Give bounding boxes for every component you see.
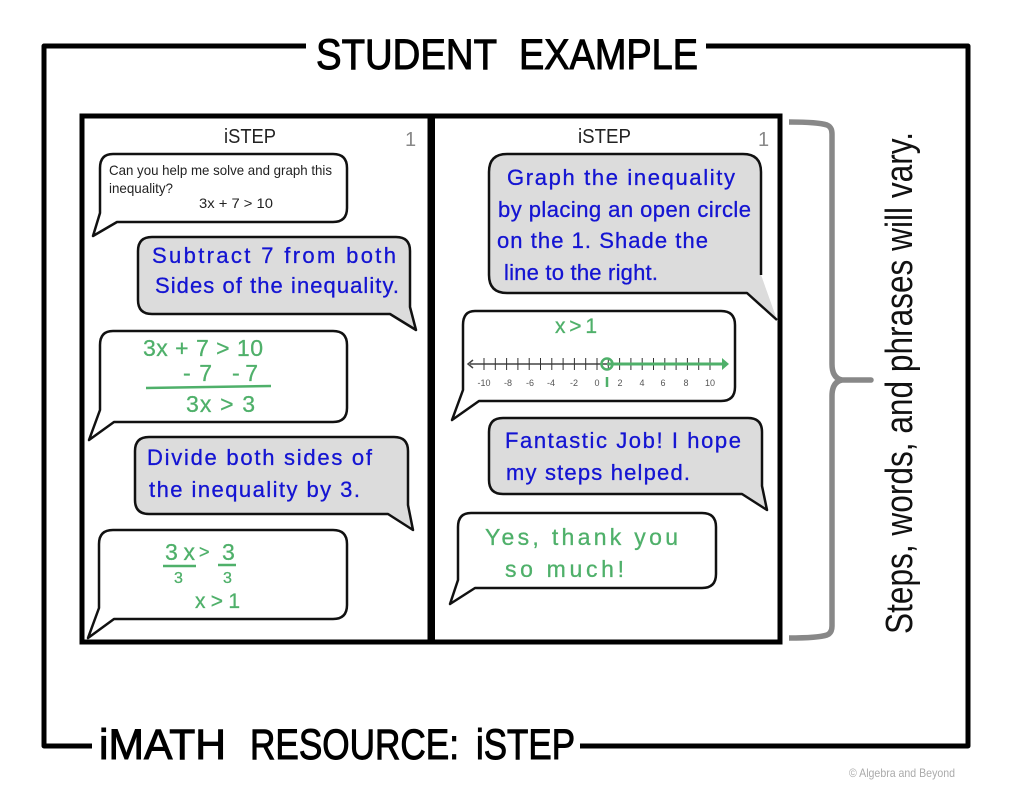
panel: right iSTEP	[428, 116, 780, 642]
bubble: subtraction work: -7	[232, 360, 258, 386]
number line graph: 4	[639, 378, 645, 388]
bubble: division work: 3	[174, 570, 183, 587]
bubble: question: 3x + 7 > 10	[199, 195, 273, 211]
bubble: subtraction work: 3x + 7 > 10	[143, 335, 263, 361]
bubble: encouragement	[489, 418, 767, 510]
panel divider	[428, 116, 435, 642]
bubble: division work: x > 1	[195, 590, 240, 613]
footer heading: RESOURCE:	[250, 721, 459, 769]
left heading: iSTEP	[224, 126, 276, 148]
right heading: iSTEP	[578, 126, 631, 148]
bubble: division work: 3x	[165, 539, 196, 565]
bubble: graph step: by placing an open circle	[498, 197, 751, 222]
bubble: question: Can you help me solve and graph this	[109, 162, 332, 178]
number line graph: -4	[547, 378, 555, 388]
number line graph: 0	[594, 378, 600, 388]
number line graph	[468, 358, 729, 388]
footer heading: iMATH	[99, 721, 226, 769]
footer heading: iSTEP	[476, 721, 575, 769]
bubble: graph step	[489, 154, 777, 320]
number line graph: 6	[660, 378, 666, 388]
number line graph: -6	[526, 378, 534, 388]
number line graph: 2	[617, 378, 623, 388]
bubble: encouragement: Fantastic Job! I hope	[505, 428, 741, 453]
left page number: 1	[405, 129, 416, 151]
bubble: division work: 3	[222, 539, 235, 565]
panel: left iSTEP	[82, 116, 430, 642]
bubble: division work	[88, 530, 347, 638]
bubble: divide step: Divide both sides of	[147, 445, 373, 470]
bubble: question	[93, 154, 347, 236]
bubble: subtract step	[138, 237, 416, 330]
bubble: subtraction work: -7	[183, 360, 212, 386]
title: EXAMPLE	[519, 31, 698, 79]
number line graph: -8	[504, 378, 512, 388]
bubble: encouragement: my steps helped.	[506, 460, 690, 485]
copyright: © Algebra and Beyond	[849, 766, 955, 780]
bubble: divide step	[135, 437, 413, 530]
number line graph: -10	[477, 378, 491, 388]
number line graph: -2	[570, 378, 578, 388]
title: STUDENT	[316, 31, 497, 79]
bubble: number line: x > 1	[555, 315, 597, 338]
title	[316, 31, 698, 79]
bubble: question: inequality?	[109, 180, 173, 196]
number line graph: 8	[683, 378, 689, 388]
bubble: graph step: on the 1. Shade the	[497, 228, 708, 253]
bubble: graph step: line to the right.	[504, 260, 658, 285]
bubble: thank you	[450, 513, 716, 604]
bubble: subtract step: Sides of the inequality.	[155, 273, 399, 298]
bubble: subtraction work: 3x > 3	[186, 391, 255, 417]
bubble: divide step: the inequality by 3.	[149, 477, 360, 502]
bubble: thank you: Yes, thank you	[485, 524, 678, 550]
footer heading	[99, 721, 575, 769]
bracket	[789, 122, 871, 638]
side note: Steps, words, and phrases will vary.	[879, 132, 921, 634]
bubble: division work: >	[199, 542, 210, 562]
bubble: graph step: Graph the inequality	[507, 165, 735, 190]
bubble: subtract step: Subtract 7 from both	[152, 243, 396, 268]
bubble: division work: 3	[223, 570, 232, 587]
bubble: thank you: so much!	[505, 556, 624, 582]
bubble: subtraction work	[89, 331, 347, 440]
bubble: number line	[452, 311, 735, 420]
right page number: 1	[758, 129, 769, 151]
number line graph: 10	[705, 378, 715, 388]
